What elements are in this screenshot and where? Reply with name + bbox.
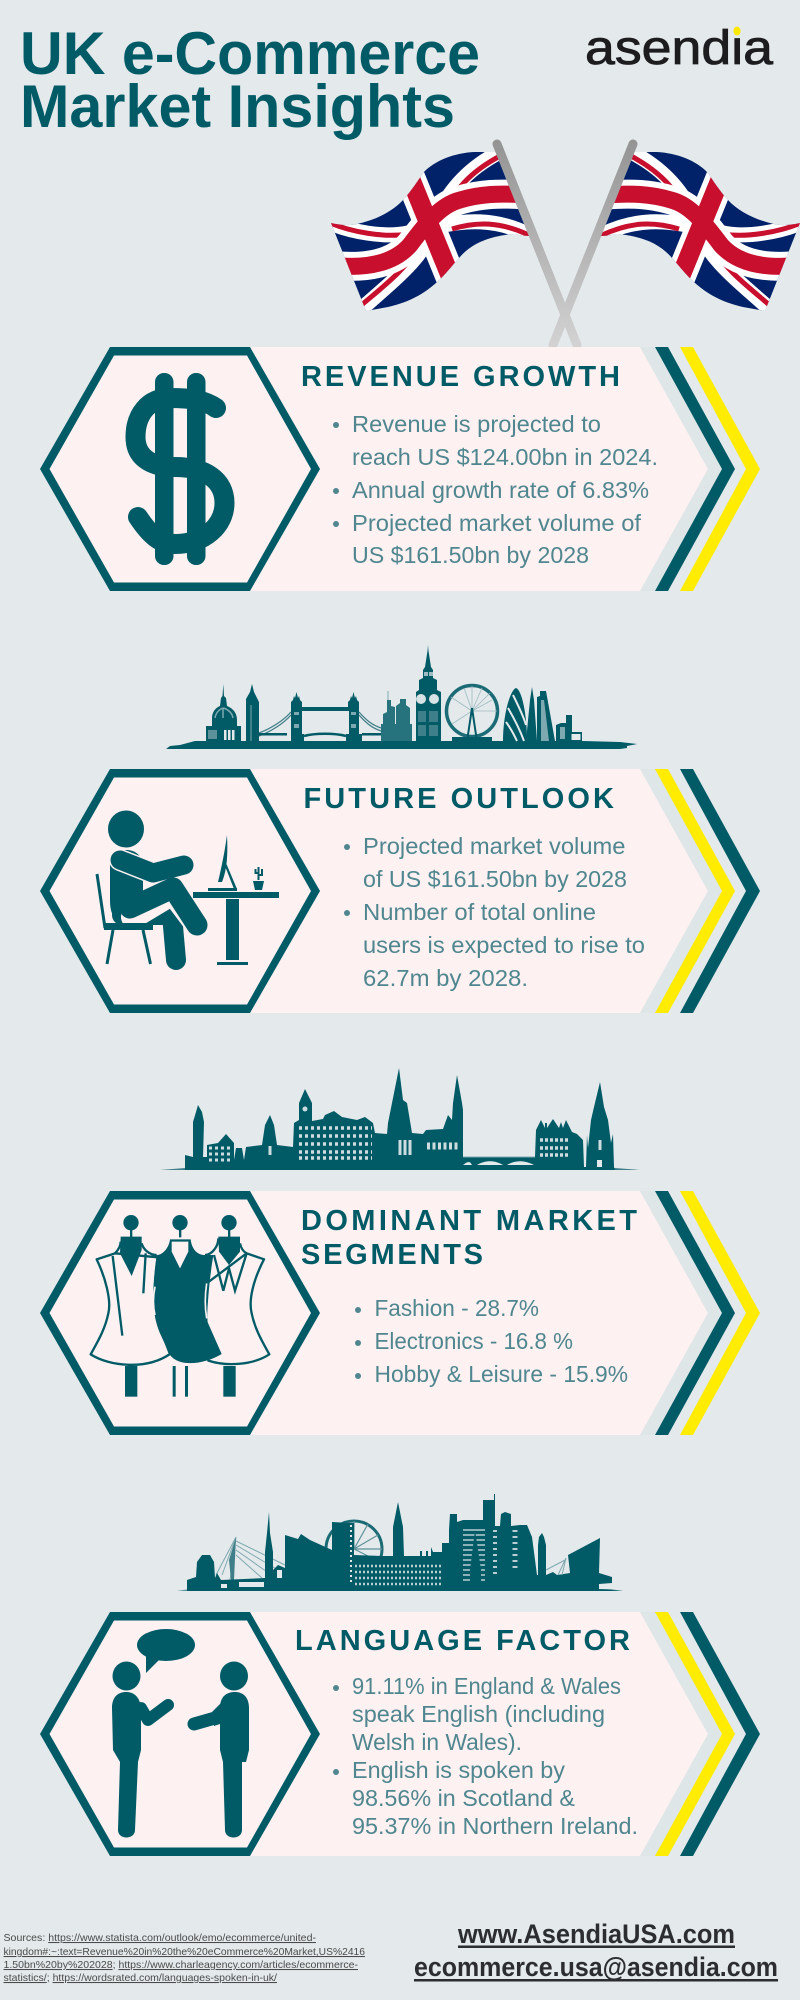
windows (209, 1128, 600, 1160)
icon: dollar sign (136, 373, 224, 565)
skyline: Manchester (177, 1494, 623, 1591)
sources text: statistics/; https://wordsrated.com/languages-spoken-in-uk/ (4, 1972, 277, 1984)
towers (381, 699, 412, 741)
bullet list: 91.11% in England & Wales (352, 1673, 621, 1699)
logo: asendia: asendia (585, 22, 773, 75)
bullet list: 62.7m by 2028. (363, 965, 528, 991)
title (20, 20, 480, 140)
panel shape (40, 347, 760, 591)
icon: three dresses on mannequins (91, 1215, 269, 1397)
Shard and Cheesegrater (526, 687, 537, 741)
bullet list: 95.37% in Northern Ireland. (352, 1813, 638, 1839)
bullet list: Fashion - 28.7% (374, 1295, 539, 1321)
icon: crossed UK flags (325, 144, 800, 345)
Gherkin (503, 688, 527, 741)
London Eye (446, 686, 498, 736)
title: Market Insights (20, 73, 455, 140)
icon: person at desk (97, 810, 279, 965)
heading: FUTURE OUTLOOK (304, 783, 614, 815)
title: UK e-Commerce (20, 20, 480, 87)
bridge cables (216, 1537, 285, 1580)
heading (301, 1205, 637, 1271)
panel shape (40, 769, 760, 1013)
bullet list: Projected market volume of (352, 510, 642, 536)
panel: dominant market segments (40, 1191, 760, 1435)
bullet list: Electronics - 16.8 % (374, 1328, 573, 1354)
heading: DOMINANT MARKET (301, 1205, 637, 1237)
bullet list: Revenue is projected to (352, 411, 601, 437)
panel shape (40, 1612, 760, 1856)
panel: revenue growth (40, 347, 760, 591)
sources text (4, 1932, 365, 1984)
sources text: kingdom#:~:text=Revenue%20in%20the%20eCommerce%20Market,US%2416 (4, 1946, 365, 1958)
website and email links: www.AsendiaUSA.com (457, 1919, 735, 1949)
website and email links: ecommerce.usa@asendia.com (414, 1952, 778, 1982)
skyline: Edinburgh (160, 1068, 640, 1170)
bullet list: users is expected to rise to (363, 932, 645, 958)
bullet list: Hobby & Leisure - 15.9% (374, 1361, 628, 1387)
bullet list: Annual growth rate of 6.83% (352, 477, 649, 503)
Tower Bridge (259, 712, 381, 736)
bullet list: US $161.50bn by 2028 (352, 542, 589, 568)
bullet list: speak English (including (352, 1701, 605, 1727)
bullet list: Number of total online (363, 899, 596, 925)
icon: two people talking (112, 1629, 249, 1838)
bullet list: of US $161.50bn by 2028 (363, 866, 627, 892)
bullet list (333, 411, 658, 568)
sources text: 1.50bn%20by%202028; https://www.charleagency.com/articles/ecommerce- (4, 1959, 358, 1971)
cut-outs and windows (221, 1584, 227, 1588)
bullet list: English is spoken by (352, 1757, 565, 1783)
skyline: London (166, 645, 637, 749)
bullet list: reach US $124.00bn in 2024. (352, 444, 658, 470)
bullet list: 98.56% in Scotland & (352, 1785, 575, 1811)
panel: language factor (40, 1612, 760, 1856)
bullet list (333, 1673, 638, 1839)
bullet list (344, 833, 645, 991)
heading: LANGUAGE FACTOR (295, 1625, 630, 1657)
Big Ben (416, 645, 441, 741)
website and email links (414, 1919, 778, 1982)
heading: REVENUE GROWTH (301, 361, 620, 393)
panel shape (40, 1191, 760, 1435)
bullet list (355, 1295, 628, 1387)
sources text: Sources: https://www.statista.com/outlook/emo/ecommerce/united- (4, 1932, 317, 1944)
heading: SEGMENTS (301, 1239, 483, 1271)
bullet list: Welsh in Wales). (352, 1729, 522, 1755)
St Paul's (206, 684, 241, 741)
Ferris wheel (326, 1521, 382, 1577)
bullet list: Projected market volume (363, 833, 626, 859)
panel: future outlook (40, 769, 760, 1013)
